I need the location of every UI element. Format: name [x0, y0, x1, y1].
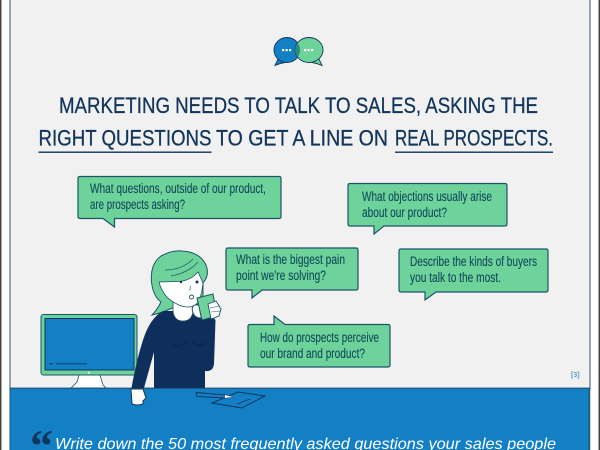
speech bubble: questions outside product: What questions, outside of our product, — [90, 181, 266, 196]
title — [38, 93, 553, 153]
speech bubble: biggest pain point: What is the biggest pain — [236, 252, 345, 267]
speech bubble: biggest pain point: point we're solving? — [236, 268, 326, 283]
illustration: woman drinking from mug — [131, 251, 221, 405]
speech bubble: objections — [348, 184, 507, 234]
panel: blue quote band — [10, 388, 590, 450]
speech bubble: questions outside product: are prospects asking? — [90, 197, 185, 212]
speech bubble: objections: about our product? — [362, 205, 447, 220]
title: TO GET A LINE ON — [216, 126, 388, 150]
speech bubble: brand perception: How do prospects perceive — [260, 330, 379, 345]
speech bubble: kinds of buyers: you talk to the most. — [410, 270, 501, 285]
speech bubble: brand perception — [248, 316, 390, 367]
speech bubble: biggest pain point — [226, 248, 358, 298]
speech bubble: kinds of buyers: Describe the kinds of buyers — [410, 254, 537, 269]
icon: chat bubbles — [274, 38, 323, 66]
speech bubble: questions outside product — [78, 176, 281, 227]
quote block — [30, 420, 556, 450]
illustration: paper and pencil — [196, 392, 265, 408]
citation: [3] — [571, 372, 580, 379]
title: REAL PROSPECTS. — [395, 126, 553, 150]
speech bubble: objections: What objections usually arise — [362, 189, 492, 204]
title: RIGHT QUESTIONS — [38, 126, 212, 150]
speech bubble: kinds of buyers — [399, 249, 548, 300]
illustration: computer monitor — [41, 314, 137, 388]
speech bubble: brand perception: our brand and product? — [260, 346, 365, 361]
